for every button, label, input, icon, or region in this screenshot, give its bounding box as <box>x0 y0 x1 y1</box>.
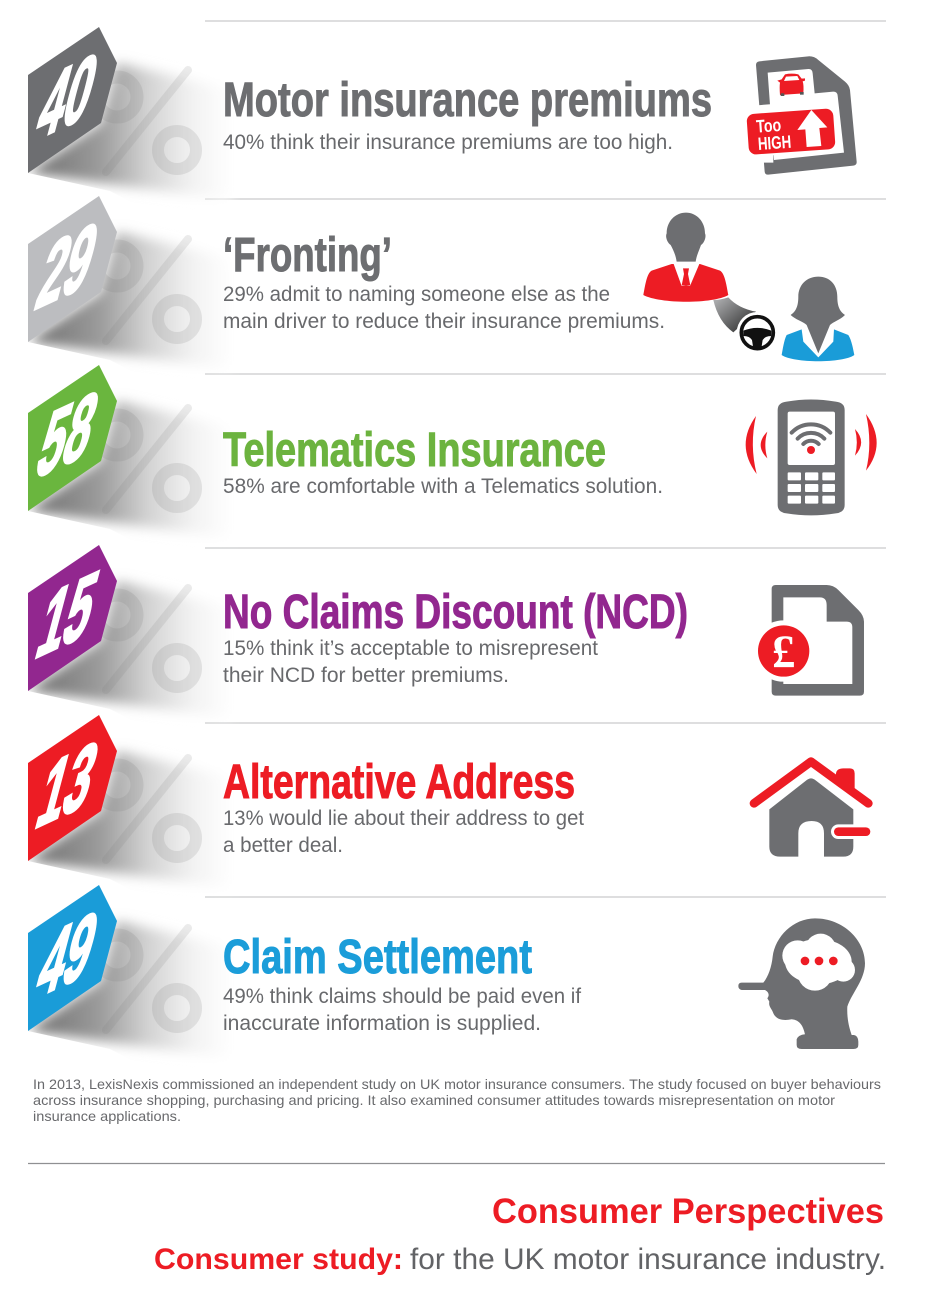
badge shadow: row 3 <box>28 401 232 538</box>
text: fronting: main driver to reduce their insurance premiums. <box>223 310 665 333</box>
badge shadow: row 1 <box>28 63 232 200</box>
icon: too high document <box>746 56 857 175</box>
heading: Alternative Address: Alternative Address <box>223 756 575 809</box>
footer subtitle: Consumer study: <box>154 1243 403 1276</box>
badge: 49 percent: 49 <box>28 889 108 1020</box>
text: no claims discount <box>223 637 598 687</box>
text: claim settlement: inaccurate information is supplied. <box>223 1012 541 1035</box>
text: fronting <box>223 283 665 333</box>
study note: insurance applications. <box>33 1108 181 1124</box>
footer title: Consumer Perspectives <box>492 1192 884 1231</box>
badge shadow: row 4 <box>28 581 232 718</box>
badge: 15 percent: 15 <box>28 549 108 680</box>
icon: document with pound coin <box>753 585 864 696</box>
text: claim settlement <box>223 985 581 1035</box>
heading: Claim Settlement: Claim Settlement <box>223 931 532 984</box>
footer subtitle: for the UK motor insurance industry. <box>410 1243 886 1276</box>
icon: house with minus sign <box>754 762 868 857</box>
text: claim settlement: 49% think claims should be paid even if <box>223 985 581 1008</box>
icon: too high document: Too <box>756 115 782 137</box>
study note <box>33 1076 881 1124</box>
text: no claims discount: 15% think it’s acceptable to misrepresent <box>223 637 598 660</box>
icon: head with long nose and thought cloud <box>738 918 865 1049</box>
badge: 58 percent: 58 <box>28 369 108 500</box>
heading: Motor insurance premiums: Motor insurance premiums <box>223 74 712 127</box>
badge shadow: row 2 <box>28 232 232 369</box>
icon: too high document: HIGH <box>757 132 792 154</box>
text: telematics: 58% are comfortable with a Telematics solution. <box>223 475 663 498</box>
study note: across insurance shopping, purchasing and pricing. It also examined consumer attitudes towards misrepresentation on motor <box>33 1092 835 1108</box>
study note: In 2013, LexisNexis commissioned an independent study on UK motor insurance consumers. The study focused on buyer behaviours <box>33 1076 881 1092</box>
heading: Telematics Insurance: Telematics Insurance <box>223 424 606 477</box>
badge shadow: row 6 <box>28 921 232 1058</box>
text: motor insurance: 40% think their insurance premiums are too high. <box>223 131 673 154</box>
footer subtitle <box>154 1243 886 1276</box>
text: alternative address: 13% would lie about their address to get <box>223 807 584 830</box>
heading: No Claims Discount: No Claims Discount (NCD) <box>223 586 688 639</box>
icon: telematics phone <box>746 399 877 515</box>
text: fronting: 29% admit to naming someone else as the <box>223 283 610 306</box>
text: no claims discount: their NCD for better premiums. <box>223 664 509 687</box>
icon: document with pound coin: £ <box>772 626 795 678</box>
icon: man, steering wheel and woman <box>643 213 854 361</box>
badge shadow: row 5 <box>28 751 232 888</box>
badge: 13 percent: 13 <box>28 719 108 850</box>
heading: Fronting: ‘Fronting’ <box>223 229 392 282</box>
badge: 29 percent: 29 <box>28 200 108 331</box>
text: alternative address <box>223 807 584 857</box>
badge: 40 percent: 40 <box>28 31 108 162</box>
text: alternative address: a better deal. <box>223 834 343 857</box>
